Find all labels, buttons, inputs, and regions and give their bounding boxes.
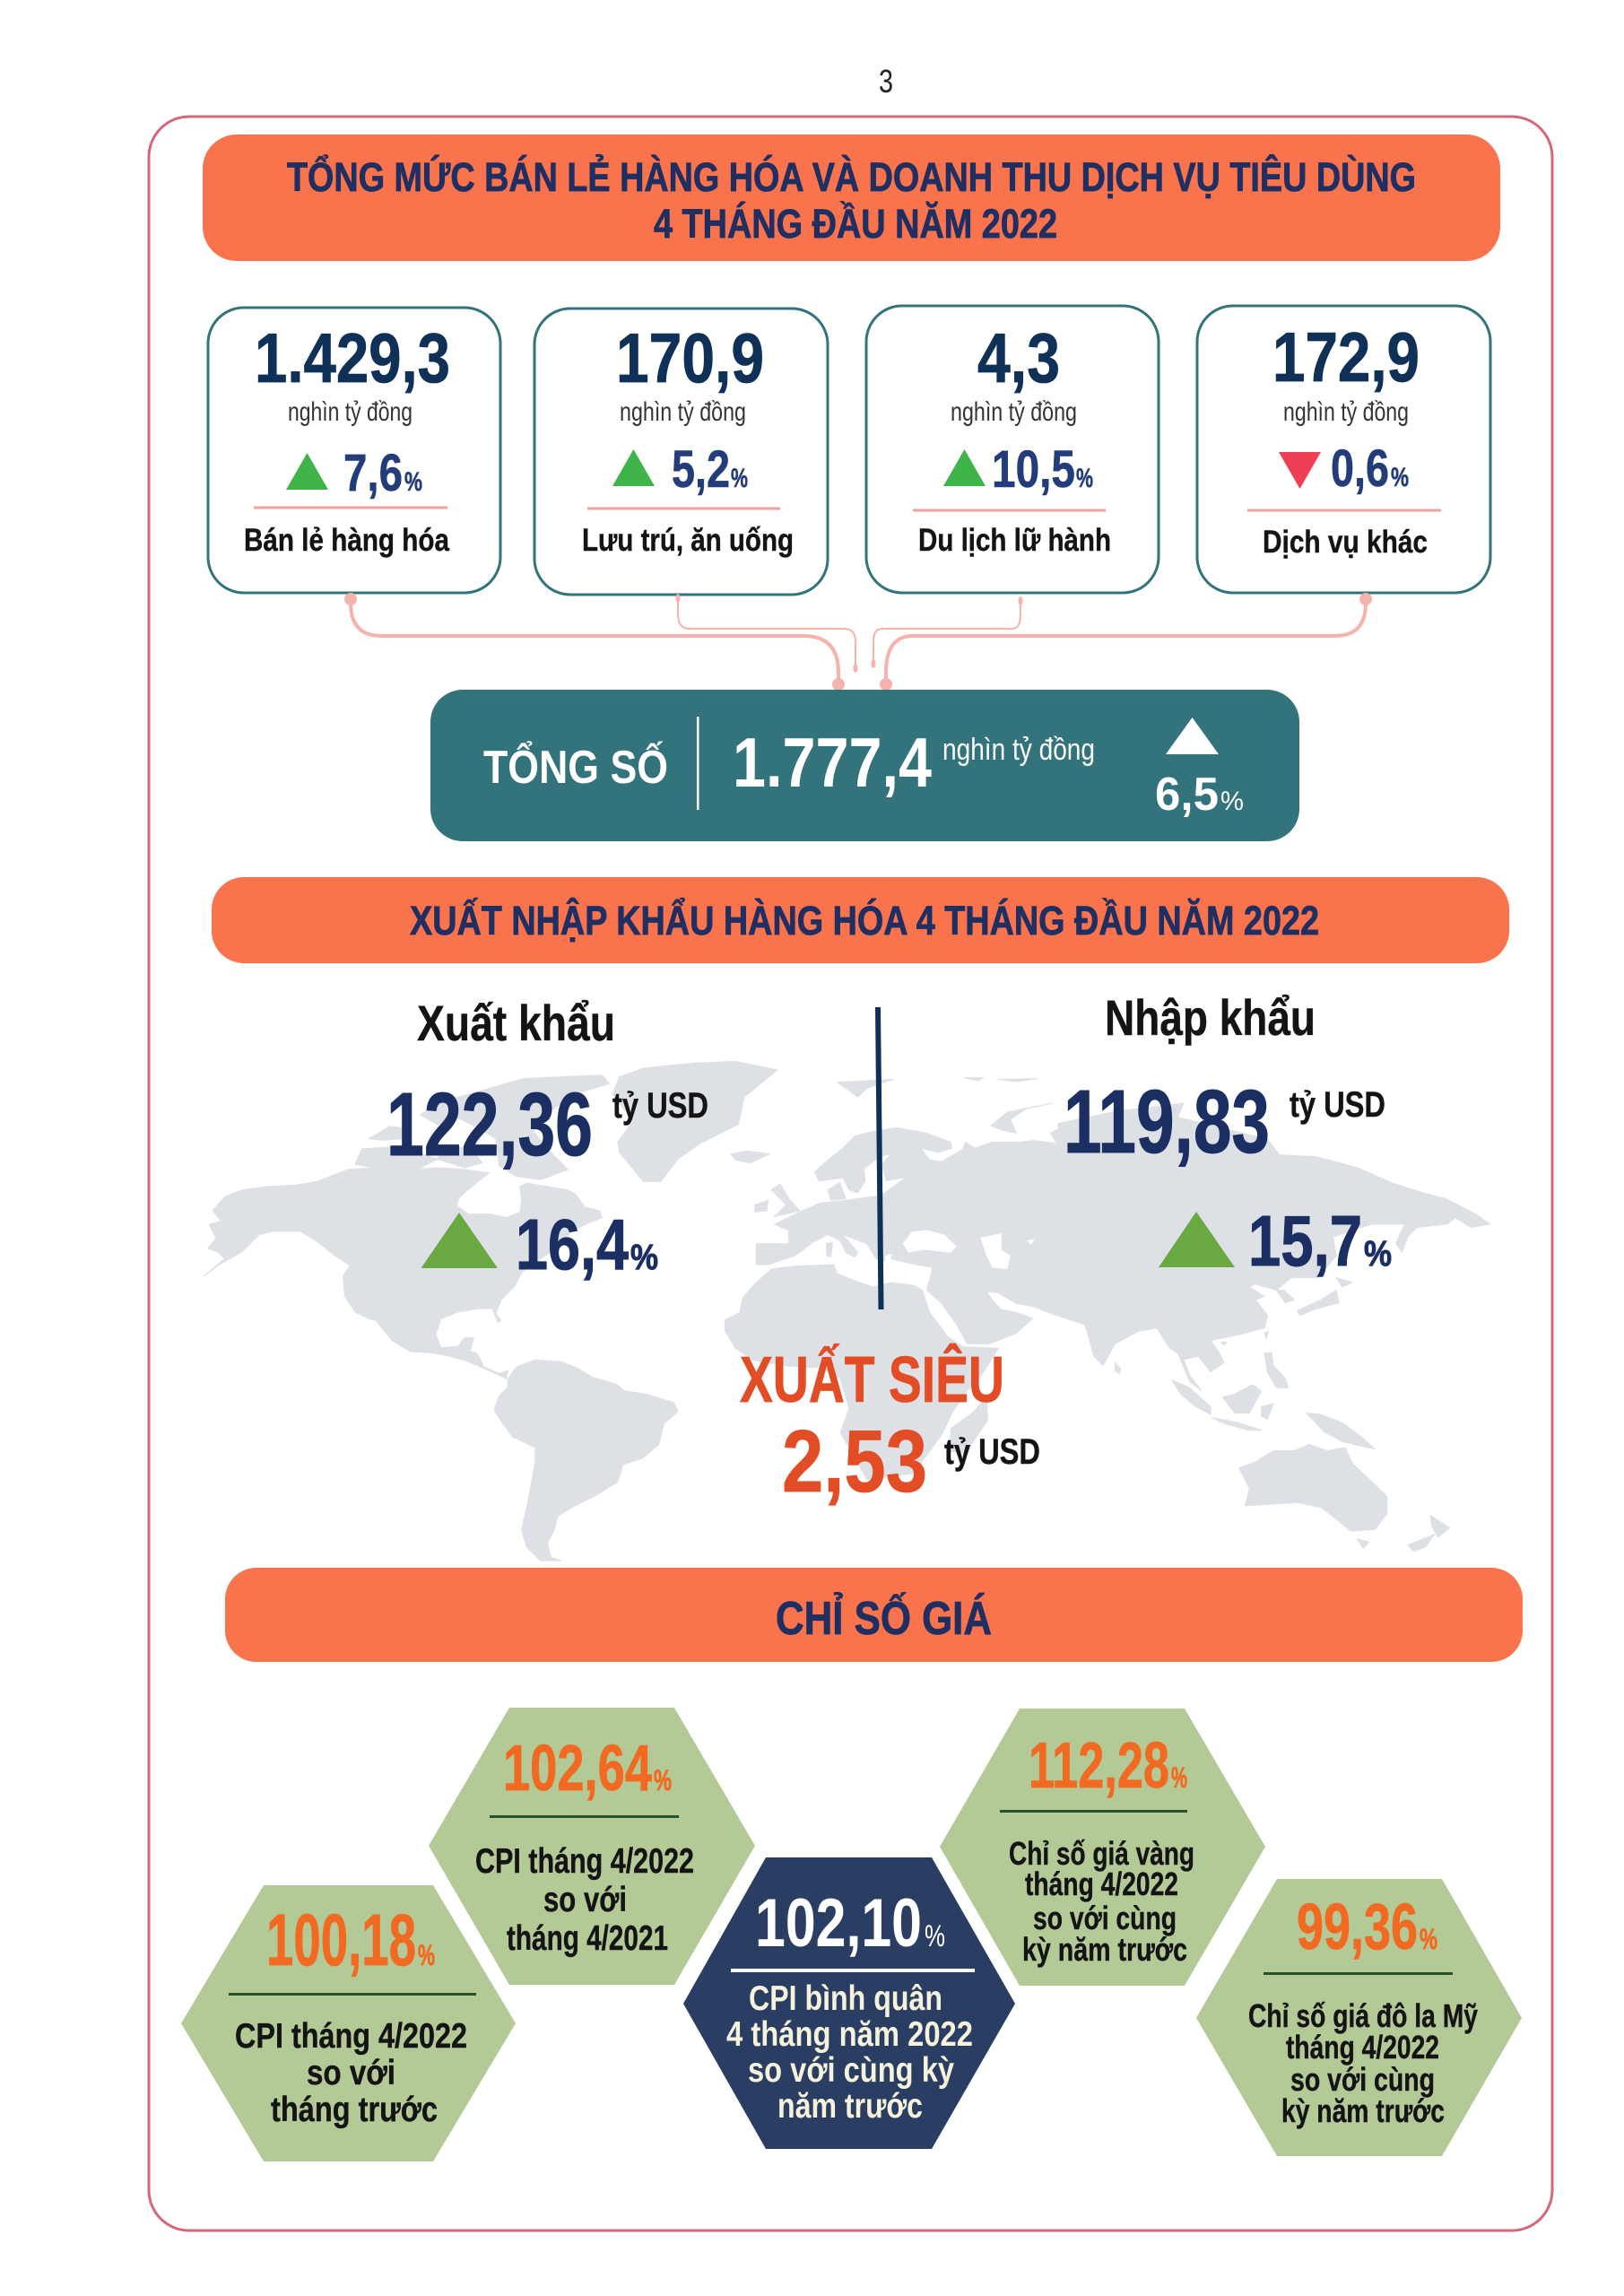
- panel: hexagon CPI vs previous month: 100,18: [266, 1900, 416, 1981]
- panel: card retail goods: Bán lẻ hàng hóa: [244, 523, 449, 558]
- world map: [204, 1061, 1490, 1561]
- panel: hexagon CPI vs previous month: %: [418, 1939, 435, 1971]
- panel: total box: %: [1220, 787, 1244, 816]
- panel: hexagon US dollar index: 99,36: [1297, 1892, 1418, 1963]
- callout: trade surplus: [740, 1344, 1040, 1510]
- panel: trade heading: XUẤT NHẬP KHẨU HÀNG HÓA 4 THÁNG ĐẦU NĂM 2022: [410, 898, 1319, 944]
- panel: retail heading: 4 THÁNG ĐẦU NĂM 2022: [654, 201, 1057, 247]
- panel: imports: 15,7: [1248, 1201, 1362, 1281]
- panel: hexagon CPI vs same month last year: [429, 1708, 755, 1985]
- panel: hexagon US dollar index: tháng 4/2022: [1286, 2029, 1439, 2066]
- panel: imports: Nhập khẩu: [1105, 989, 1316, 1046]
- panel: card other services: %: [1391, 463, 1409, 492]
- panel: card travel: Du lịch lữ hành: [918, 523, 1111, 558]
- panel: hexagon gold price index: kỳ năm trước: [1022, 1931, 1187, 1968]
- panel: hexagon gold price index: Chỉ số giá vàng: [1009, 1835, 1194, 1872]
- panel: total box: TỔNG SỐ: [483, 741, 668, 794]
- panel: imports: 119,83: [1064, 1072, 1270, 1172]
- panel: hexagon gold price index: so với cùng: [1033, 1900, 1177, 1936]
- panel: hexagon average CPI: 102,10: [755, 1885, 922, 1961]
- panel: hexagon gold price index: 112,28: [1029, 1730, 1169, 1802]
- panel: card other services: Dịch vụ khác: [1263, 525, 1428, 560]
- panel: card retail goods: %: [404, 467, 422, 497]
- panel: trade heading: [212, 877, 1509, 963]
- panel: total box: 1.777,4: [733, 723, 932, 802]
- panel: imports: tỷ USD: [1290, 1085, 1385, 1125]
- panel: hexagon gold price index: %: [1171, 1761, 1187, 1794]
- panel: card retail goods: nghìn tỷ đồng: [288, 397, 413, 427]
- panel: card retail goods: 1.429,3: [255, 318, 450, 397]
- panel: hexagon US dollar index: so với cùng: [1290, 2061, 1435, 2098]
- panel: hexagon US dollar index: %: [1420, 1923, 1437, 1955]
- panel: hexagon average CPI: [683, 1857, 1015, 2149]
- panel: hexagon CPI vs same month last year: 102,64: [503, 1733, 652, 1805]
- panel: retail heading: TỔNG MỨC BÁN LẺ HÀNG HÓA VÀ DOANH THU DỊCH VỤ TIÊU DÙNG: [287, 154, 1416, 200]
- panel: card travel: %: [1076, 464, 1093, 493]
- panel: hexagon CPI vs previous month: so với: [307, 2054, 395, 2092]
- panel: card other services: 172,9: [1272, 317, 1420, 396]
- arrow: connectors to total: [344, 593, 1372, 691]
- panel: exports: 122,36: [386, 1074, 593, 1175]
- panel: card retail goods: [208, 308, 500, 593]
- panel: card retail goods: 7,6: [343, 444, 403, 502]
- panel: card travel: 10,5: [992, 440, 1075, 499]
- panel: card travel: [866, 306, 1159, 593]
- panel: hexagon CPI vs same month last year: CPI tháng 4/2022: [475, 1842, 694, 1881]
- panel: hexagon gold price index: tháng 4/2022: [1025, 1866, 1178, 1902]
- panel: retail heading: [203, 135, 1500, 261]
- panel: hexagon average CPI: %: [925, 1919, 945, 1953]
- panel: imports: %: [1364, 1234, 1392, 1274]
- panel: imports: [1064, 989, 1392, 1281]
- panel: price index heading: CHỈ SỐ GIÁ: [776, 1592, 992, 1645]
- panel: hexagon US dollar index: [1196, 1879, 1522, 2156]
- callout: trade surplus: tỷ USD: [944, 1432, 1040, 1472]
- panel: total box: 6,5: [1155, 769, 1219, 821]
- callout: trade surplus: XUẤT SIÊU: [740, 1344, 1004, 1416]
- panel: card accommodation: 170,9: [616, 318, 764, 397]
- panel: card accommodation: %: [731, 464, 748, 493]
- callout: trade surplus: 2,53: [782, 1412, 927, 1510]
- panel: hexagon gold price index: [940, 1709, 1265, 1986]
- divider: [878, 1007, 881, 1309]
- outer frame: [149, 117, 1552, 2231]
- panel: hexagon average CPI: năm trước: [777, 2087, 923, 2126]
- panel: hexagon US dollar index: kỳ năm trước: [1281, 2092, 1445, 2129]
- panel: card accommodation: [534, 309, 828, 595]
- panel: hexagon CPI vs previous month: tháng trước: [271, 2091, 438, 2129]
- panel: total box: [430, 690, 1299, 841]
- page number: 3: [879, 63, 893, 100]
- panel: exports: Xuất khẩu: [417, 995, 615, 1051]
- panel: hexagon average CPI: CPI bình quân: [749, 1979, 942, 2018]
- panel: hexagon CPI vs same month last year: %: [654, 1764, 672, 1796]
- panel: card travel: nghìn tỷ đồng: [951, 397, 1077, 427]
- panel: exports: tỷ USD: [612, 1086, 708, 1126]
- panel: hexagon average CPI: 4 tháng năm 2022: [726, 2015, 973, 2054]
- panel: card accommodation: nghìn tỷ đồng: [620, 397, 746, 427]
- panel: hexagon CPI vs previous month: [181, 1885, 516, 2161]
- panel: hexagon average CPI: so với cùng kỳ: [748, 2051, 954, 2090]
- panel: total box: nghìn tỷ đồng: [942, 733, 1095, 767]
- panel: hexagon US dollar index: Chỉ số giá đô la Mỹ: [1248, 1997, 1478, 2034]
- panel: card accommodation: 5,2: [672, 440, 730, 499]
- panel: card travel: 4,3: [977, 318, 1060, 397]
- panel: price index heading: [225, 1568, 1523, 1662]
- panel: card other services: 0,6: [1331, 439, 1389, 498]
- panel: card other services: nghìn tỷ đồng: [1283, 397, 1409, 427]
- panel: hexagon CPI vs previous month: CPI tháng 4/2022: [235, 2017, 467, 2056]
- panel: hexagon CPI vs same month last year: tháng 4/2021: [507, 1919, 668, 1958]
- panel: exports: %: [630, 1238, 658, 1277]
- panel: hexagon CPI vs same month last year: so với: [543, 1881, 627, 1919]
- panel: card accommodation: Lưu trú, ăn uống: [582, 523, 794, 558]
- panel: card other services: [1197, 306, 1490, 593]
- panel: exports: 16,4: [516, 1205, 629, 1284]
- panel: exports: [386, 995, 708, 1284]
